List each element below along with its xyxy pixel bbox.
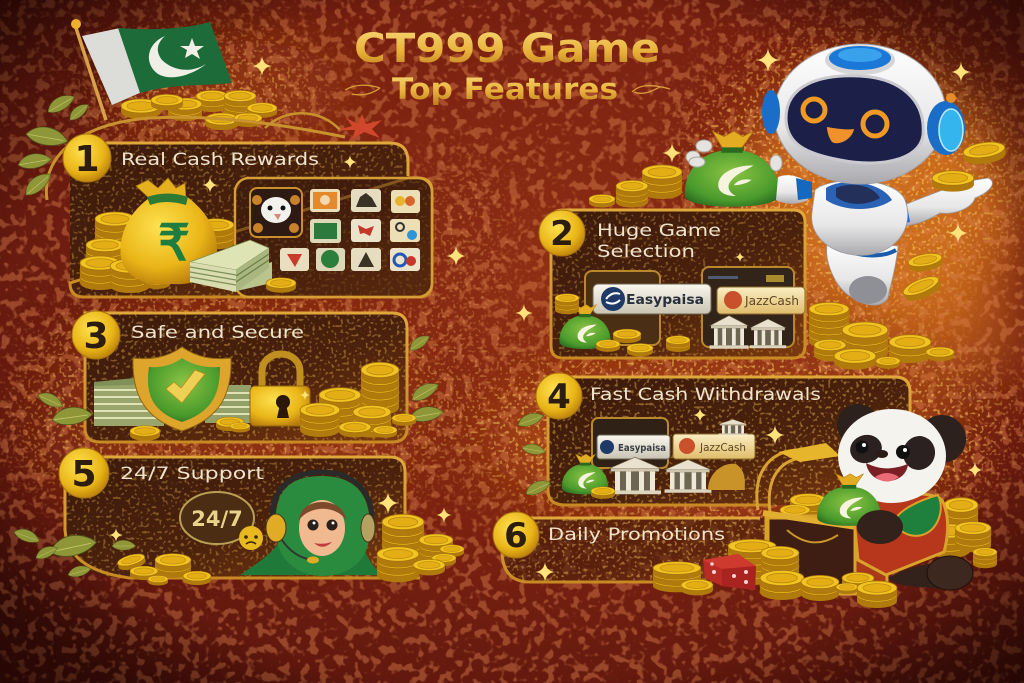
flag pole <box>76 28 106 120</box>
phone <box>592 418 668 468</box>
flag cloth <box>82 28 142 105</box>
phone 2 <box>702 267 794 347</box>
arm with green sleeve <box>894 495 941 536</box>
number badge 6 <box>493 512 539 558</box>
robot mouth <box>827 127 854 143</box>
chest body <box>767 517 857 593</box>
heading: 24/7 Support <box>120 464 264 484</box>
icon: cash bundle <box>190 240 272 292</box>
robot head <box>774 44 946 184</box>
coins held and falling <box>901 140 1007 305</box>
eye patches <box>847 431 885 467</box>
heading: Fast Cash Withdrawals <box>590 385 821 405</box>
small game tile icons <box>280 189 420 271</box>
payment badge: JazzCash: JazzCash <box>744 294 799 308</box>
icon: gold rupee bag <box>120 178 217 285</box>
treasure chest with gold <box>757 443 887 593</box>
gold pile <box>708 464 745 490</box>
number badge 2: 2 <box>550 214 574 254</box>
number badge 3 <box>72 311 120 359</box>
icon: bank buildings <box>710 316 786 349</box>
title flourish left <box>345 85 380 95</box>
title: CT999 Game Top Features <box>345 26 670 106</box>
panel frame <box>70 143 432 297</box>
coin near cash <box>266 278 296 293</box>
panda mascot <box>817 404 973 590</box>
foliage <box>12 526 136 579</box>
panel 2: Huge Game Selection <box>538 208 806 360</box>
icon: green shield with check <box>133 347 231 431</box>
number badge 1 <box>63 134 111 182</box>
icon: 24/7 bubble: 24/7 <box>191 507 243 531</box>
phone 1 <box>585 271 660 345</box>
robot left hand <box>686 140 782 171</box>
coin stacks beside panel 2 and robot bag <box>589 165 954 370</box>
number badge 4 <box>536 373 582 419</box>
legs and foot <box>888 563 967 590</box>
number badge 3: 3 <box>83 316 109 357</box>
head <box>838 409 946 503</box>
coins in panel <box>555 294 690 356</box>
robot arm left <box>776 175 812 204</box>
panel frame <box>502 518 780 582</box>
panel frame <box>65 457 405 578</box>
heading: Safe and Secure <box>131 323 304 343</box>
panel frame <box>85 313 407 442</box>
icon: emoji chat bubble <box>239 526 263 550</box>
green money bag held by robot <box>685 131 779 207</box>
title line 2: Top Features <box>392 72 618 106</box>
panel 6: Daily Promotions <box>492 512 764 584</box>
crescent and star <box>149 36 206 77</box>
payment badge: JazzCash: JazzCash <box>699 441 746 454</box>
panel 1: Real Cash Rewards <box>62 134 434 298</box>
nose and mouth <box>876 450 888 458</box>
number badge 5: 5 <box>71 454 97 495</box>
coin pile around chest <box>653 498 997 608</box>
eyes <box>856 440 868 454</box>
number badge 4: 4 <box>547 377 571 417</box>
game tiles box <box>235 178 432 297</box>
gold pile inside chest <box>780 494 826 524</box>
ears <box>837 404 879 446</box>
robot torso <box>812 181 908 255</box>
robot ear left <box>762 90 780 134</box>
title line 1: CT999 Game <box>354 26 660 72</box>
rupee symbol: ₹ <box>158 214 190 272</box>
robot mascot <box>685 44 1007 305</box>
robot eyes <box>803 99 825 121</box>
robot antenna pod <box>825 45 895 75</box>
coin pile under flag <box>121 90 277 130</box>
icon: 24/7 bubble <box>180 492 254 544</box>
coin stacks <box>116 514 464 586</box>
panel frame <box>551 210 805 358</box>
payment badge: JazzCash <box>673 434 755 459</box>
gold bars on lid <box>778 443 840 462</box>
payment badge: Easypaisa <box>593 284 711 314</box>
panel 5: 24/7 Support <box>14 448 464 586</box>
coin stacks <box>130 362 416 441</box>
panel 3: Safe and Secure <box>38 310 444 444</box>
icon: green bag <box>562 454 608 494</box>
featured panda game tile <box>250 188 302 237</box>
heading two lines <box>597 221 721 262</box>
green bag held <box>817 474 881 526</box>
icon: red dice <box>703 554 756 590</box>
foliage <box>36 332 445 427</box>
payment badge: JazzCash <box>717 287 805 314</box>
heading: Real Cash Rewards <box>121 150 319 170</box>
decorative foliage and flower around panel 1 <box>17 90 382 200</box>
icon: Pakistan flag with coin pile <box>71 19 277 130</box>
icon: green money bag small <box>559 304 611 349</box>
number badge 1: 1 <box>74 139 100 180</box>
icon: bank buildings <box>609 419 747 494</box>
icon: gold padlock <box>250 354 310 426</box>
foliage <box>516 409 553 498</box>
body and vest <box>853 493 948 575</box>
robot leg and foot <box>827 240 898 305</box>
panel frame <box>548 377 910 505</box>
icon: cash stacks <box>94 378 251 426</box>
support agent with headset <box>240 472 382 576</box>
number badge 5 <box>59 448 109 498</box>
number badge 2 <box>539 210 585 256</box>
title flourish right <box>632 86 670 93</box>
number badge 6: 6 <box>504 516 528 556</box>
robot visor <box>786 76 923 163</box>
payment badge: Easypaisa <box>597 435 670 459</box>
chest lid handle <box>757 450 800 512</box>
coin stacks beside bag <box>80 212 234 293</box>
coin <box>591 487 615 499</box>
robot arm right with hand <box>900 178 992 226</box>
heading two lines: Huge Game <box>597 221 721 241</box>
sparkles <box>109 48 983 582</box>
robot ear right <box>927 101 965 155</box>
heading: Daily Promotions <box>548 525 725 545</box>
payment badge: Easypaisa: Easypaisa <box>626 293 704 308</box>
panel 4: Fast Cash Withdrawals <box>518 372 912 506</box>
heading two lines: Selection <box>597 242 695 262</box>
payment badge: Easypaisa: Easypaisa <box>618 443 666 454</box>
